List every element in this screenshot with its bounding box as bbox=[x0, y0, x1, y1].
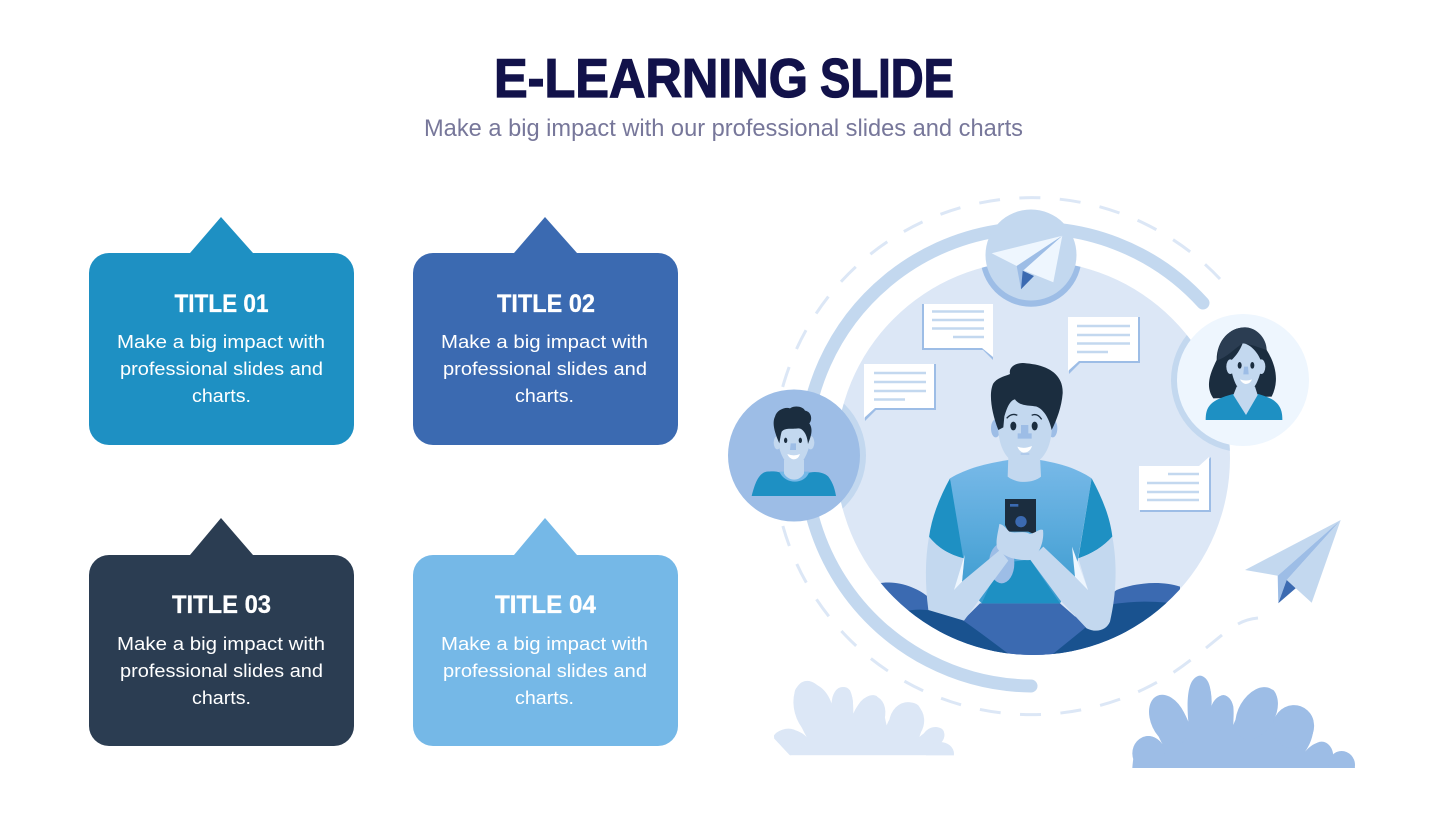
thick orbit ring bbox=[805, 228, 1203, 686]
facial features bbox=[1007, 414, 1042, 454]
panel: title 02: charts. bbox=[515, 386, 574, 406]
hair bbox=[991, 363, 1063, 430]
title: E-LEARNING bbox=[494, 47, 808, 109]
panel: title 02: TITLE 02 bbox=[497, 290, 595, 318]
arms bbox=[926, 537, 1116, 631]
panel: title 01: professional slides and bbox=[120, 359, 323, 379]
person with phone bbox=[878, 363, 1180, 670]
panel: title 02 bbox=[413, 217, 678, 445]
subtitle: Make a big impact with our professional slides and charts bbox=[424, 115, 1023, 142]
right bush bbox=[1132, 676, 1355, 768]
speech bubble: upper left bbox=[922, 304, 993, 360]
panel: title 03: Make a big impact with bbox=[117, 634, 325, 654]
icon: paper plane badge bbox=[986, 210, 1076, 300]
panel: title 01: TITLE 01 bbox=[174, 290, 269, 318]
panel: title 03: professional slides and bbox=[120, 661, 323, 681]
panel: title 04: charts. bbox=[515, 688, 574, 708]
hand bbox=[997, 524, 1043, 560]
face bbox=[998, 400, 1052, 465]
speech bubble: lower right bbox=[1139, 457, 1211, 512]
neck bbox=[1008, 457, 1041, 482]
title: SLIDE bbox=[820, 47, 954, 109]
phone bbox=[1005, 499, 1036, 535]
panel: title 03 bbox=[89, 518, 354, 746]
panel: title 04 bbox=[413, 518, 678, 746]
left bush bbox=[774, 681, 954, 756]
dashed orbit path bbox=[773, 198, 1258, 715]
avatar: woman bbox=[1177, 314, 1309, 446]
ears bbox=[991, 419, 1057, 437]
panel: title 02: professional slides and bbox=[443, 359, 647, 379]
panel: title 03: charts. bbox=[192, 688, 251, 708]
panel: title 01: charts. bbox=[192, 386, 251, 406]
panel: title 01 bbox=[89, 217, 354, 445]
shirt bbox=[929, 460, 1112, 603]
main background circle bbox=[836, 261, 1230, 655]
panel: title 04: Make a big impact with bbox=[441, 634, 648, 654]
panel: title 02: Make a big impact with bbox=[441, 332, 648, 352]
icon: large paper plane bbox=[1245, 520, 1341, 603]
speech bubble: upper right bbox=[1068, 317, 1140, 374]
panel: title 01: Make a big impact with bbox=[117, 332, 325, 352]
speech bubble: left bbox=[864, 364, 936, 421]
avatar ring crescents bbox=[841, 266, 1230, 508]
panel: title 04: professional slides and bbox=[443, 661, 647, 681]
avatar: man bbox=[728, 390, 860, 522]
legs bbox=[880, 582, 1180, 655]
panel: title 04: TITLE 04 bbox=[495, 591, 596, 619]
panel: title 03: TITLE 03 bbox=[172, 591, 271, 619]
